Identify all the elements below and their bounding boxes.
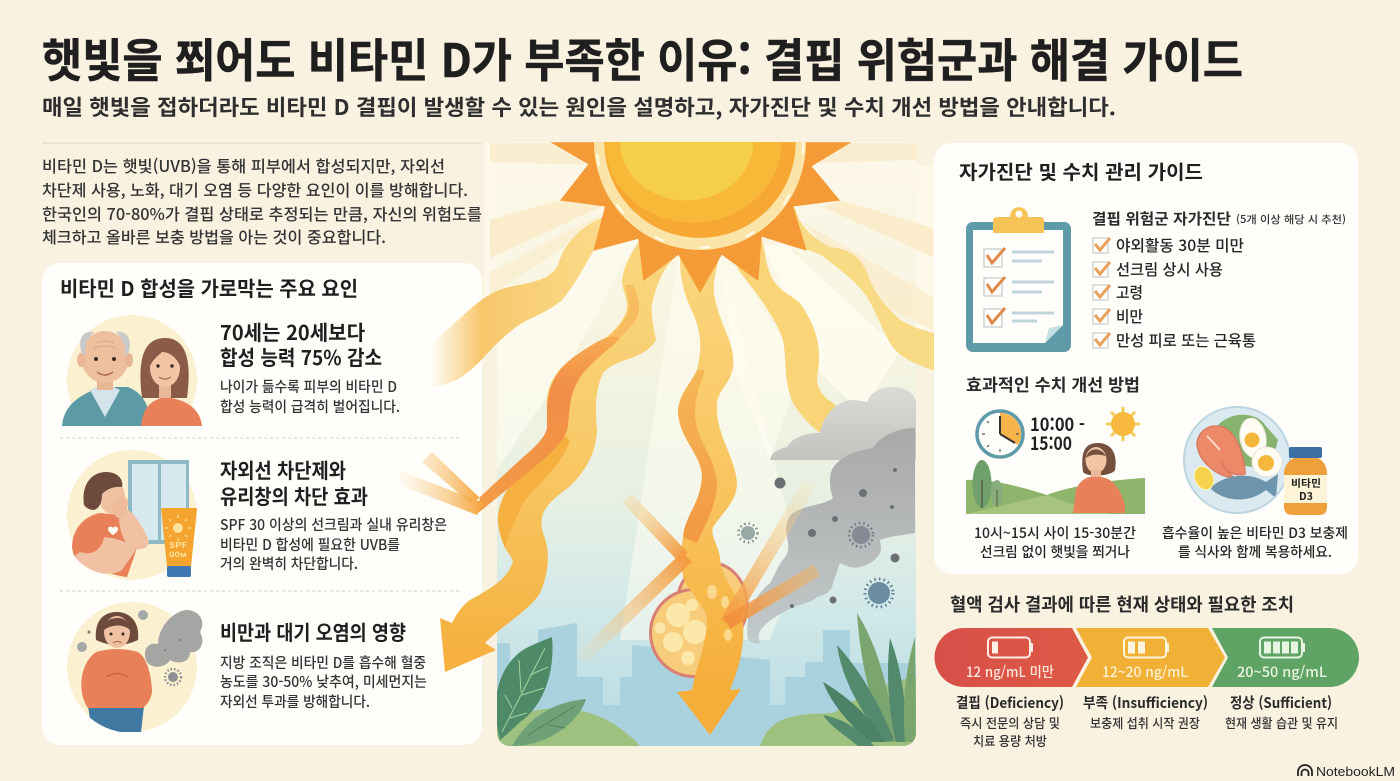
icon: virus blue (865, 579, 893, 607)
icon: virus grey (849, 523, 873, 547)
subtitle: 매일 햇빛을 접하더라도 비타민 D 결핍이 발생할 수 있는 원인을 설명하고, 자가진단 및 수치 개선 방법을 안내합니다. (42, 91, 1116, 122)
panel: factors blocking vitamin D synthesis (42, 142, 1394, 776)
sun (550, 142, 852, 293)
factor 2 description (220, 514, 447, 574)
checklist items: 선크림 상시 사용 (1116, 258, 1223, 280)
city skyline (497, 623, 916, 746)
intro text block (42, 143, 482, 248)
icon: elderly man and young woman (62, 315, 202, 426)
supplement bottle (1284, 447, 1327, 515)
icon: half battery (1124, 638, 1169, 658)
caption: sunlight (974, 523, 1136, 562)
wavy ray lower left ending in big arrow (440, 240, 678, 672)
spiky plants right (823, 613, 916, 746)
factor 2 heading: 자외선 차단제와 (220, 454, 346, 484)
factor 3 description: 농도를 30-50% 낮추여, 미세먼지는 (220, 671, 427, 692)
panel heading: 비타민 D 합성을 가로막는 주요 요인 (60, 272, 358, 302)
leaves left (496, 637, 586, 746)
icon: sunscreen tube: 00м (169, 550, 187, 560)
factor 3: obesity and air pollution (67, 602, 427, 732)
factor 1 description: 나이가 듦수록 피부의 비타민 D (220, 376, 397, 397)
factor 2 description: 거의 완벽히 차단합니다. (220, 553, 358, 574)
segment: deficiency: 12 ng/mL 미만 (966, 662, 1054, 682)
segment: sufficient: 20~50 ng/mL (1237, 662, 1327, 682)
factor 1 heading: 70세는 20세보다 (220, 316, 365, 346)
blood test status section (934, 591, 1359, 750)
central illustration: sun rays reaching city (400, 142, 940, 746)
checklist items: 비만 (1116, 305, 1143, 327)
factor 2 description: SPF 30 이상의 선크림과 실내 유리창은 (220, 514, 447, 535)
panel heading: 자가진단 및 수치 관리 가이드 (959, 156, 1203, 185)
dark smoke (747, 428, 915, 644)
factor 2: sunscreen and window (67, 450, 447, 580)
intro text block: 한국인의 70-80%가 결핍 상태로 추정되는 만큼, 자신의 위험도를 (42, 201, 482, 225)
icon: clipboard (966, 207, 1071, 352)
factor 2 heading (220, 454, 368, 510)
factor 1 description: 합성 능력이 급격히 벌어집니다. (220, 396, 400, 417)
caption: supplement: 흡수율이 높은 비타민 D3 보충제 (1162, 523, 1348, 543)
woman outdoors (1073, 443, 1125, 513)
clock time label: 15:00 (1030, 430, 1072, 456)
factor 1 heading: 합성 능력 75% 감소 (220, 341, 382, 371)
checklist heading: 결핍 위험군 자가진단 (1092, 208, 1231, 229)
label: insufficiency: 부족 (Insufficiency) (1083, 692, 1208, 713)
factor 1 heading (220, 316, 382, 371)
icon: woman with smog and virus (67, 602, 202, 732)
title: 햇빛을 쬐어도 비타민 D가 부족한 이유: 결핍 위험군과 해결 가이드 (42, 25, 1243, 91)
wavy ray far right (782, 207, 940, 373)
icon: sunscreen tube: SPF (169, 540, 187, 551)
label: deficiency (956, 692, 1064, 750)
NotebookLM logo: NotebookLM (1316, 764, 1395, 779)
clock (977, 411, 1023, 457)
clock time label (1030, 411, 1085, 456)
sky background (484, 142, 934, 746)
checklist heading (1092, 208, 1346, 229)
panel: self-check and management guide (934, 143, 1358, 574)
checklist items: 야외활동 30분 미만 (1116, 234, 1244, 256)
small sun (1106, 407, 1140, 441)
label: insufficiency (1083, 692, 1208, 732)
factor 1: age (62, 315, 399, 426)
label: sufficient: 현재 생활 습관 및 유지 (1225, 713, 1338, 732)
caption: supplement: 를 식사와 함께 복용하세요. (1178, 542, 1332, 562)
deflected rays at center left (580, 498, 687, 660)
hills (497, 677, 916, 746)
segment: deficiency (934, 628, 1088, 687)
reflected rays through smoke (727, 483, 817, 623)
intro text block: 체크하고 올바른 보충 방법을 아는 것이 중요합니다. (42, 224, 386, 248)
fat cell (650, 563, 747, 676)
factor 3 heading: 비만과 대기 오염의 영향 (220, 616, 406, 646)
checklist heading: (5개 이상 해당 시 추천) (1236, 212, 1346, 227)
section heading: 혈액 검사 결과에 따른 현재 상태와 필요한 조치 (950, 591, 1294, 617)
label: deficiency: 즉시 전문의 상담 및 (960, 713, 1060, 732)
label: insufficiency: 보충제 섭취 시작 권장 (1090, 713, 1200, 732)
factor 2 description: 비타민 D 합성에 필요한 UVB를 (220, 534, 400, 555)
factor 3 description: 자외선 투과를 방해합니다. (220, 691, 370, 712)
checklist items: 만성 피로 또는 근육통 (1116, 329, 1256, 351)
pale cloud (770, 387, 916, 460)
segment: insufficiency: 12~20 ng/mL (1102, 662, 1188, 682)
improvement section heading: 효과적인 수치 개선 방법 (966, 371, 1140, 396)
factor 2 heading: 유리창의 차단 효과 (220, 480, 368, 510)
icon: woman applying sunscreen by window (67, 450, 197, 580)
label: sufficient (1225, 692, 1338, 732)
segment: insufficiency (1076, 628, 1225, 687)
icon: low battery (988, 638, 1033, 658)
label: deficiency: 결핍 (Deficiency) (956, 692, 1064, 713)
label: sufficient: 정상 (Sufficient) (1230, 692, 1332, 713)
pale light beams (490, 143, 933, 640)
factor 1 description (220, 376, 400, 417)
factor 3 description: 지방 조직은 비타민 D를 흡수해 혈중 (220, 652, 426, 673)
orange ray ending in chevron arrow (400, 337, 620, 515)
icon: virus small (738, 524, 758, 542)
intro text block: 차단제 사용, 노화, 대기 오염 등 다양한 요인이 이를 방해합니다. (42, 177, 468, 201)
icon: vitamin D food plate and supplement (1184, 407, 1327, 515)
supplement bottle: D3 (1299, 489, 1313, 504)
label: deficiency: 치료 용량 처방 (973, 731, 1047, 750)
caption: sunlight: 선크림 없이 햇빛을 쬐거나 (980, 542, 1130, 562)
wavy ray right (737, 240, 850, 433)
icon: full battery (1260, 638, 1305, 658)
central wavy ray with arrowhead (677, 255, 743, 735)
intro text block: 비타민 D는 햇빛(UVB)을 통해 피부에서 합성되지만, 자외선 (42, 153, 445, 177)
caption: supplement (1162, 523, 1348, 562)
pollutant particles (774, 468, 900, 608)
checklist items (1093, 234, 1256, 351)
wavy ray far left fading over panel (430, 217, 603, 387)
icon: sunscreen tube (161, 508, 197, 577)
clock time label: 10:00 - (1030, 411, 1085, 437)
checklist items: 고령 (1116, 281, 1143, 303)
caption: sunlight: 10시~15시 사이 15-30분간 (974, 523, 1136, 543)
icon: sunlight scene with clock (966, 407, 1145, 514)
supplement bottle: 비타민 (1291, 475, 1321, 490)
factor 3 description (220, 652, 427, 712)
segment: sufficient (1212, 628, 1359, 687)
